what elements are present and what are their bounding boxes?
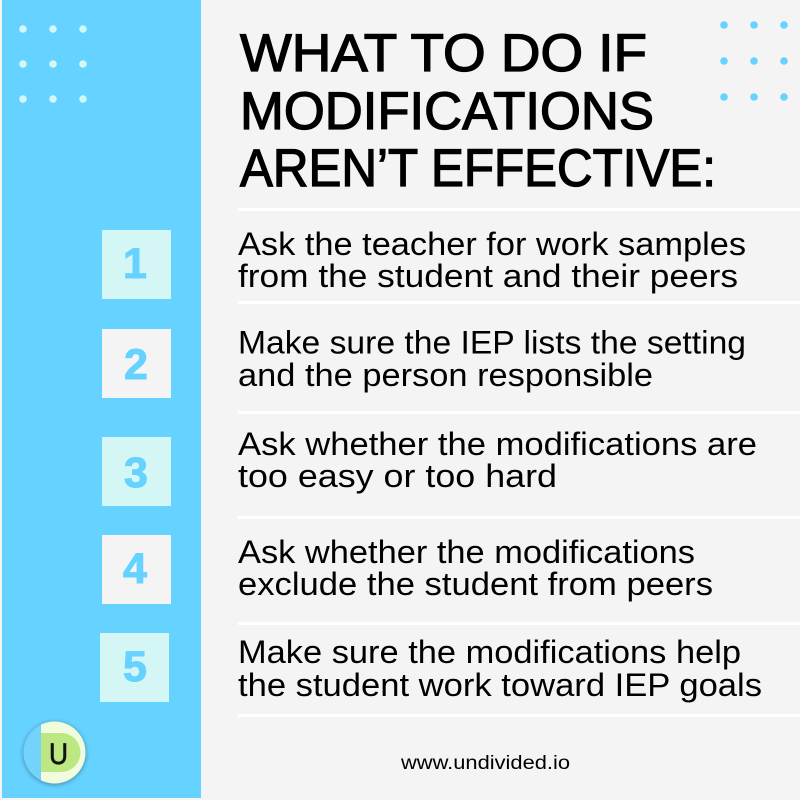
step 3 text: Ask whether the modifications are <box>238 426 757 462</box>
step 5 number box <box>100 633 169 702</box>
step 1 number box: 1 <box>123 240 147 288</box>
step 5 text: the student work toward IEP goals <box>238 667 762 703</box>
step 1 number box <box>102 230 171 299</box>
step 3 number box: 3 <box>124 449 148 497</box>
step 2 number box <box>102 329 171 398</box>
step 2 number box: 2 <box>124 341 148 389</box>
decorative dots: left <box>19 25 87 103</box>
website url: www.undivided.io <box>400 753 570 774</box>
step 2 text <box>238 324 746 393</box>
step 1 text: from the student and their peers <box>238 258 738 294</box>
step 5 number box: 5 <box>123 643 147 691</box>
step 2 text: Make sure the IEP lists the setting <box>238 324 746 360</box>
step 1 text: Ask the teacher for work samples <box>238 226 746 262</box>
step 5 text: Make sure the modifications help <box>238 634 741 670</box>
icon: Undivided logo <box>23 722 86 785</box>
title: WHAT TO DO IF <box>240 24 647 83</box>
step 4 text: exclude the student from peers <box>238 566 713 602</box>
decorative dots: right <box>720 21 788 101</box>
panel: blue sidebar <box>2 0 201 798</box>
step 3 text: too easy or too hard <box>238 458 557 494</box>
step 3 number box <box>102 437 171 506</box>
step 4 text <box>238 534 713 602</box>
step 3 text <box>238 426 757 494</box>
step 5 text <box>238 634 762 703</box>
title: AREN’T EFFECTIVE: <box>240 139 716 198</box>
icon: Undivided logo: U <box>49 738 68 771</box>
title <box>240 24 716 198</box>
step 4 number box: 4 <box>123 545 147 593</box>
step 4 text: Ask whether the modifications <box>238 534 695 570</box>
step 2 text: and the person responsible <box>238 357 653 393</box>
step 4 number box <box>102 535 171 604</box>
divider lines <box>238 208 800 717</box>
step 1 text <box>238 226 746 294</box>
title: MODIFICATIONS <box>240 82 654 141</box>
